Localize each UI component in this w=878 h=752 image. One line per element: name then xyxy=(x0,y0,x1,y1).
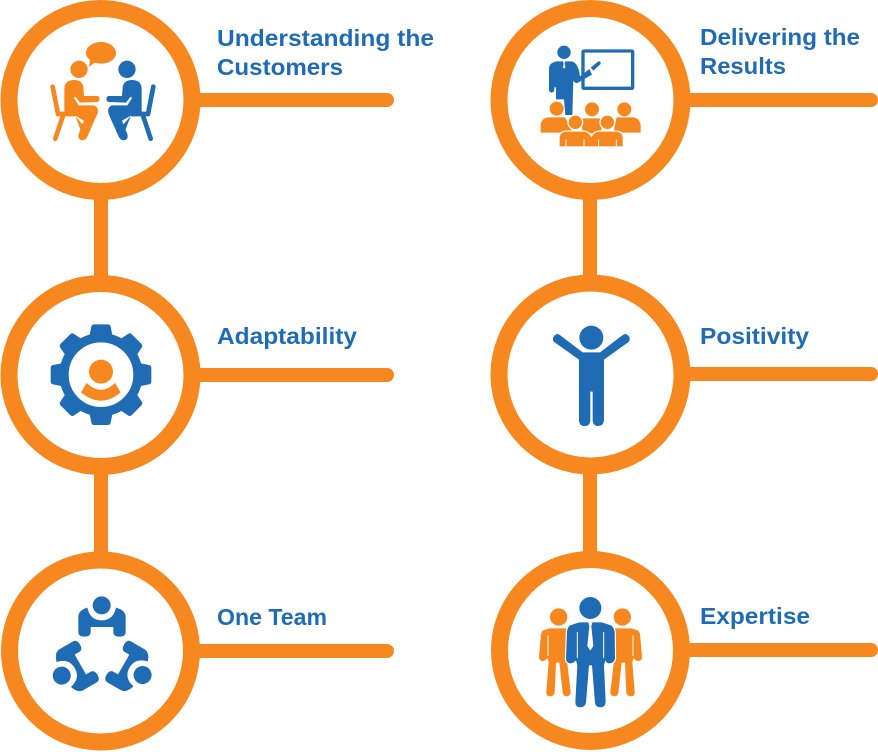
panel: Adaptability xyxy=(9,284,394,466)
leader bar xyxy=(195,368,394,382)
whiteboard xyxy=(583,51,633,88)
heading: One Team xyxy=(217,604,327,630)
icon: presenter and audience xyxy=(541,46,641,147)
heading second line: Customers xyxy=(217,54,343,80)
seat dividers xyxy=(566,139,616,147)
panel: Expertise xyxy=(500,560,878,742)
connector: left column top xyxy=(94,190,108,285)
panel: One Team xyxy=(10,560,394,742)
panel: Positivity xyxy=(499,283,878,466)
ring xyxy=(499,283,682,466)
panel: Delivering the Results xyxy=(499,8,878,192)
right person xyxy=(103,639,162,700)
ring xyxy=(500,560,682,742)
connector: right column top xyxy=(583,190,597,285)
left person xyxy=(42,639,101,700)
heading: Understanding the xyxy=(217,25,434,51)
icon: person with raised arms xyxy=(553,326,630,426)
chair xyxy=(53,87,74,139)
presenter xyxy=(549,46,601,115)
icon: three business people xyxy=(539,597,642,707)
icon: two people talking xyxy=(53,42,153,140)
icon: three people around a table xyxy=(42,596,162,700)
figure xyxy=(106,61,142,140)
top person xyxy=(78,596,126,637)
gear xyxy=(51,324,151,425)
leader bar xyxy=(685,367,878,381)
heading second line: Results xyxy=(700,53,786,79)
figure xyxy=(64,61,100,140)
heading: Expertise xyxy=(700,603,810,629)
leader bar xyxy=(195,93,394,107)
blue person and chair xyxy=(106,61,153,140)
tie xyxy=(563,61,565,69)
leader bar xyxy=(195,644,394,658)
panel: Understanding the Customers xyxy=(9,8,434,192)
speech bubble xyxy=(86,42,116,67)
orange arm separators xyxy=(548,635,633,656)
heading: Delivering the xyxy=(700,24,860,50)
ring xyxy=(499,8,682,192)
centre blue person xyxy=(566,597,615,707)
orange person and chair xyxy=(53,61,100,140)
icon: gear with person xyxy=(51,324,151,425)
leader bar xyxy=(685,643,878,657)
connector: left column bottom xyxy=(94,465,108,562)
leader bar xyxy=(685,93,878,107)
tie xyxy=(587,621,593,651)
person xyxy=(81,360,121,401)
blue arm separators xyxy=(577,632,604,658)
ring xyxy=(10,560,192,742)
heading: Positivity xyxy=(700,323,809,349)
audience xyxy=(541,102,641,147)
right orange person xyxy=(610,608,642,696)
ring xyxy=(9,8,192,192)
chair xyxy=(132,87,153,139)
heading: Adaptability xyxy=(217,323,357,349)
connector: right column bottom xyxy=(583,465,597,562)
ring xyxy=(9,284,192,466)
left orange person xyxy=(539,608,571,696)
